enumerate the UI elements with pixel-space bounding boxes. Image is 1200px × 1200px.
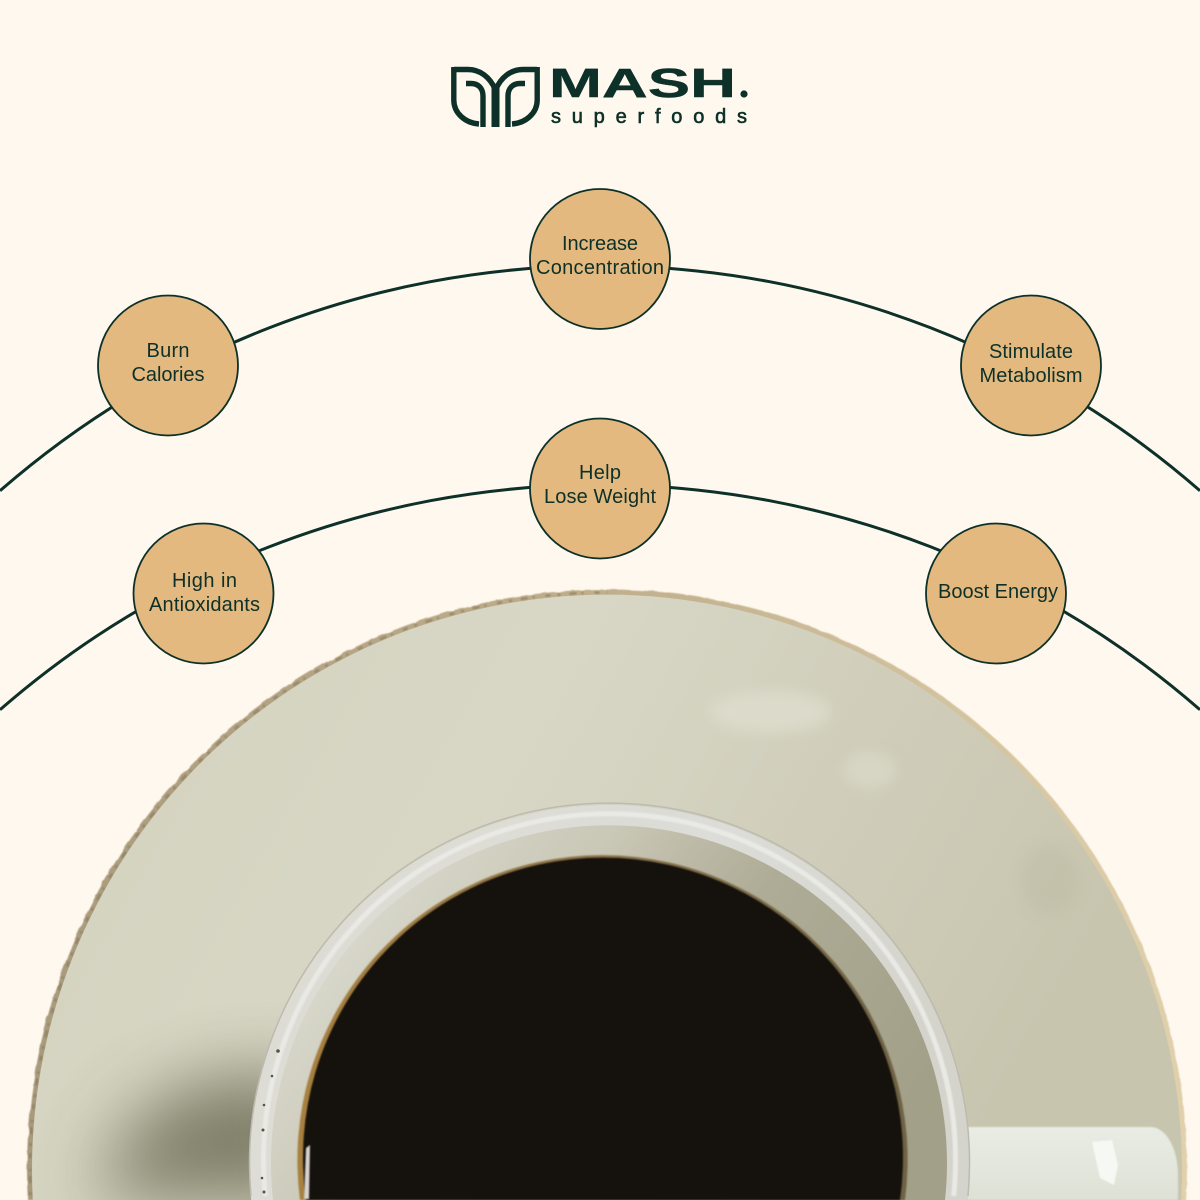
node: Help Lose Weight: Help [579,462,621,484]
node: Boost Energy: Boost Energy [938,581,1058,603]
node: Increase Concentration [530,189,670,329]
node: Burn Calories: Calories [132,364,204,386]
photo: coffee cup on saucer [27,590,1187,1200]
saucer rim [27,590,1187,1200]
speckles on lip [261,1049,280,1194]
node: Help Lose Weight: Lose Weight [544,486,656,508]
reflection on coffee [304,1145,310,1199]
node: Increase Concentration: Increase [562,233,638,255]
icon: leaf mark [454,67,537,127]
node: High in Antioxidants [134,524,274,664]
rim speckle [30,592,607,1195]
node: Stimulate Metabolism: Metabolism [980,365,1082,387]
handle highlight [1092,1140,1118,1185]
coffee crema edge [297,855,908,1200]
cup lip [249,805,969,1200]
cup lip outline [250,803,970,1196]
brand name: MASH [549,60,736,106]
upper arc connector [0,266,1200,491]
lower arc connector [0,485,1200,710]
brand period [740,90,748,98]
node: High in Antioxidants: Antioxidants [149,594,260,616]
cup inner wall [271,825,947,1200]
node: High in Antioxidants: High in [172,570,237,592]
node: Increase Concentration: Concentration [536,257,664,279]
node: Stimulate Metabolism [961,296,1101,436]
coffee [303,858,903,1200]
brand tagline: superfoods [551,106,747,128]
node: Help Lose Weight [530,418,670,558]
logo: MASH superfoods [454,60,748,128]
node: Burn Calories: Burn [146,340,190,362]
saucer shading [66,694,947,1200]
cup lip bright band [263,814,955,1196]
node: Stimulate Metabolism: Stimulate [989,341,1073,363]
node: Burn Calories [98,296,238,436]
saucer surface [32,595,1182,1200]
node: Boost Energy [926,524,1066,664]
cup handle [960,1127,1178,1200]
